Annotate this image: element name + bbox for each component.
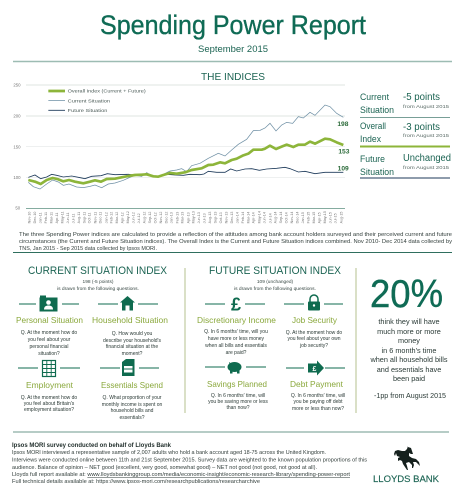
discretionary income question [204,329,268,356]
essentials spend question: monthly income is spent on [102,402,163,408]
x axis month labels: Feb-11 [44,212,48,223]
x axis month labels: Jul-14 [268,213,272,223]
overall index change: -3 points [403,122,440,133]
statistic description [369,317,448,383]
x axis month labels: Jul-15 [334,213,338,223]
subheading [234,279,316,292]
x axis month labels: May-11 [60,211,64,223]
text block: methodology note: TNS, Jan 2015 - Sep 2015 data collected by Ipsos MORI. [19,246,157,252]
x axis month labels: Dec-10 [33,212,37,223]
employment question: you feel about Britain's [24,401,75,407]
discretionary income question: when all bills and essentials [205,343,267,349]
x axis month labels: Aug-11 [77,212,81,223]
x axis month labels: May-12 [126,211,130,223]
y axis labels: 200 [13,114,21,119]
statistic description: been paid [393,374,425,383]
series: future situation [28,167,343,179]
x axis month labels: Dec-13 [230,212,234,223]
end value labels: 153 [338,148,350,155]
x axis month labels: May-13 [192,211,196,223]
savings planned question: than now? [226,405,250,411]
icon: debt arrow with pound: £ [313,366,317,373]
icon: pound sign [205,294,265,314]
x axis month labels: Apr-15 [317,212,321,223]
heading: FUTURE SITUATION INDEX [209,265,342,277]
icon: essentials spend card [100,359,159,376]
subheading: 109 (unchanged) [257,279,294,285]
savings planned question [208,393,268,411]
x axis month labels: Aug-12 [142,212,146,223]
discretionary income question: Q. In 6 months' time, will you [204,329,268,335]
household situation question [103,331,161,357]
logo: lloyds bank [373,446,440,485]
x axis month labels: Sep-14 [279,212,283,223]
heading: CURRENT SITUATION INDEX [28,265,168,277]
title: Spending Power Report [100,10,366,40]
icon: pound sign: £ [231,294,241,314]
x axis month labels: Sep-13 [214,212,218,223]
savings planned question: you be saving more or less [208,399,268,405]
future situation change: from August 2015 [403,165,450,170]
current situation change: Current [360,92,389,103]
series: current situation [28,105,343,189]
x axis month labels: Mar-11 [50,212,54,223]
discretionary income question: have more or less money [208,336,265,342]
x axis month labels: Nov-10 [28,212,32,223]
legend: Overall Index (Current + Future) [68,89,146,94]
footer text: Interviews were conducted online between 11th and 21st September 2015. Survey data are weighted to the known population proportions of this [12,458,367,464]
employment question [21,395,77,413]
statistic description: when all household bills [369,355,448,364]
footer text: Full technical details available at: https://www.ipsos-mori.com/researchpublications/researcharchive [12,479,260,485]
statistic description: in 6 month's time [382,346,436,355]
essentials spend question: household bills and [111,408,154,414]
x axis month labels: Jul-11 [71,214,75,223]
x axis month labels: Nov-11 [93,212,97,223]
employment question: Q. At the moment how do [21,395,77,401]
x axis month labels: Jan-14 [235,212,239,223]
legend: Current Situation [68,98,110,103]
job security question: job security? [299,343,328,349]
x axis month labels: Feb-14 [241,212,245,223]
x axis month labels: Oct-11 [88,213,92,223]
debt payment question: you be paying off debt [293,399,343,405]
wordmark: LLOYDS BANK [373,474,440,485]
overall index change: Overall [360,121,386,132]
future situation change: Unchanged [403,153,451,164]
discretionary income heading: Discretionary Income [197,315,276,325]
end value labels [337,121,350,173]
x axis month labels: Dec-11 [99,212,103,223]
household situation heading: Household Situation [92,315,168,325]
personal situation question [21,330,77,357]
subheading: is drawn from the following questions. [234,286,316,292]
x axis month labels: Dec-14 [296,212,300,223]
x axis month labels: Jun-11 [66,212,70,223]
subheading: 198 (-5 points) [83,279,114,285]
x axis month labels: Dec-12 [164,212,168,223]
text block: methodology note: The three Spending Power indices are calculated to provide a reflection of the attitudes among bank account holders surveyed and their perceived current and future [19,232,452,238]
panel: current situation index [16,265,168,421]
household situation question: describe your household's [103,338,161,344]
big number: 20% [370,273,443,316]
household situation question: financial situation at the [106,344,158,350]
future situation change: Situation [360,167,394,178]
series: overall index [28,139,343,184]
personal situation question: Q. At the moment how do [21,330,77,336]
current situation change: -5 points [403,92,440,103]
x axis month labels: Apr-14 [252,212,256,223]
icon: black horse [394,446,420,470]
statistic description: think they will have [378,317,440,326]
overall index change: from August 2015 [403,133,450,138]
debt payment question: Q. In 6 months' time, will [291,393,345,399]
x axis month labels: Jun-13 [197,212,201,223]
x axis month labels: Oct-12 [153,212,157,223]
x axis month labels: Apr-11 [55,213,59,223]
x axis month labels: Mar-12 [115,212,119,223]
future situation change: Future [360,154,385,165]
y axis labels: 150 [13,144,21,149]
x axis month labels: Jun-15 [328,212,332,223]
x axis month labels: Nov-12 [159,212,163,223]
household situation question: moment? [122,351,143,357]
y axis labels [13,83,21,211]
essentials spend question: essentials? [119,415,145,421]
icon: debt arrow with pound [286,360,345,376]
essentials spend question: Q. What proportion of your [103,395,162,401]
x axis month labels: Feb-12 [110,212,114,223]
x axis month labels: Feb-13 [175,212,179,223]
footer text: Ipsos MORI interviewed a representative sample of 2,007 adults who hold a bank account aged 18-75 across the United Kingdom. [12,450,326,456]
job security question: you feel about your own [287,336,341,342]
y axis labels: 50 [15,206,21,211]
statistic description: and essentials have [377,365,441,374]
x axis month labels: Feb-15 [306,212,310,223]
x axis month labels: Jan-12 [104,212,108,223]
overall index change [360,121,450,146]
y axis labels: 250 [13,83,21,88]
x axis month labels: Jun-12 [132,212,136,223]
overall index change: Index [360,134,381,145]
current situation change: Situation [360,105,394,116]
x axis month labels [28,211,343,223]
x axis month labels: Jan-11 [39,212,43,223]
icon: household house [98,296,158,310]
x axis month labels: Oct-13 [219,212,223,223]
essentials spend heading: Essentials Spend [101,380,163,390]
personal situation question: you feel about your [28,337,71,343]
statistic description: much more or more [377,327,441,336]
panel: 20% statistic [369,273,448,400]
line chart: spending power indices [13,83,350,223]
x axis month labels: Jun-14 [263,212,267,223]
current situation change [360,92,450,118]
panel: future situation index [197,265,345,412]
x axis month labels: Aug-15 [339,212,343,223]
x axis month labels: Mar-14 [246,212,250,223]
icon: piggy bank [205,362,266,374]
job security heading: Job Security [292,315,338,325]
icon: personal situation id card [19,296,79,312]
x axis month labels: Mar-13 [181,212,185,223]
x axis month labels: Jan-15 [301,212,305,223]
end value labels: 198 [337,121,349,128]
subheading [57,279,139,292]
statistic description: money [398,336,420,345]
footer text: audience. Balance of opinion – NET good (excellent, very good, somewhat good) – NET not good (not good, not good at all). [12,465,317,471]
employment question: employment situation? [24,407,74,413]
personal situation question: situation? [38,351,60,357]
x axis month labels: Apr-13 [186,212,190,223]
legend: Future Situation [68,108,108,113]
text block: methodology note [19,232,452,252]
job security question [286,330,342,349]
x axis month labels: Apr-12 [121,212,125,223]
y axis labels: 100 [13,175,21,180]
x axis month labels: Aug-14 [274,212,278,223]
footer text [12,450,367,485]
x axis month labels: Sep-12 [148,212,152,223]
x axis month labels: Mar-15 [312,212,316,223]
debt payment question: more or less than now? [292,406,344,412]
x axis month labels: Jul-12 [137,213,141,223]
x axis month labels: Oct-14 [285,212,289,223]
job security question: Q. At the moment how do [286,330,342,336]
heading: the indices: THE INDICES [201,71,265,83]
debt payment heading: Debt Payment [290,379,344,389]
household situation question: Q. How would you [112,331,153,337]
x axis month labels: Nov-14 [290,212,294,223]
personal situation question: personal financial [30,344,68,350]
x axis month labels: Jul-13 [203,213,207,223]
subtitle: date: September 2015 [198,44,268,55]
x axis month labels: May-15 [323,211,327,223]
x axis month labels: Aug-13 [208,212,212,223]
discretionary income question: are paid? [226,350,247,356]
x axis month labels: Nov-13 [224,212,228,223]
text block: methodology note: circumstances (the Current and Future Situation indices). The Overall Index is the Current and Future Situation indices combined. Nov 2010- Dec 2014 data collected by [19,239,452,245]
panel: index changes [360,92,451,178]
x axis month labels: May-14 [257,211,261,223]
savings planned heading: Savings Planned [207,379,267,389]
future situation change [360,153,451,178]
footer text: Lloyds full report available at: www.lloydsbankinggroup.com/media/economic-insight/economic-research-library/spending-power-report [12,472,351,478]
legend [48,89,146,113]
employment heading: Employment [26,380,74,390]
icon: padlock [284,295,343,310]
savings planned question: Q. In 6 months' time, will [211,393,265,399]
footer heading: Ipsos MORI survey conducted on behalf of Lloyds Bank [12,442,171,449]
x axis month labels: Sep-11 [82,212,86,223]
change from previous month: -1pp from August 2015 [374,391,446,400]
debt payment question [291,393,345,412]
footer: survey methodology [12,442,367,485]
icon: employment office building [18,360,80,376]
x axis month labels: Jan-13 [170,212,174,223]
end value labels: 109 [338,166,349,173]
essentials spend question [102,395,163,421]
personal situation heading: Personal Situation [16,315,83,325]
current situation change: from August 2015 [403,104,450,109]
subheading: is drawn from the following questions. [57,286,139,292]
